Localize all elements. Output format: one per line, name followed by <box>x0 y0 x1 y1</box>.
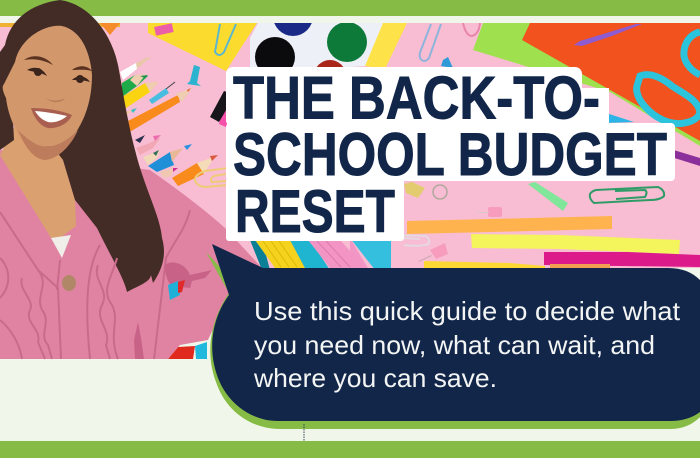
bubble navy body <box>212 244 700 421</box>
eyebrows <box>24 56 53 65</box>
title text <box>233 64 667 245</box>
blue paper clip <box>215 24 236 55</box>
gold binder clip <box>404 182 447 199</box>
green paper <box>473 23 700 146</box>
nose <box>46 98 65 102</box>
cyan scissors <box>637 32 700 124</box>
bubble text: where you can save. <box>253 363 497 393</box>
neck and chest <box>0 110 76 238</box>
title white backing <box>226 67 675 241</box>
cyan shard <box>609 114 634 123</box>
orange notebook <box>522 23 700 141</box>
yellow highlighter <box>471 234 680 254</box>
cardigan <box>0 150 262 359</box>
silver paper clip <box>404 234 430 247</box>
purple marker <box>675 150 700 166</box>
gold paper clip <box>195 168 228 187</box>
cyan block <box>352 241 391 268</box>
woman illustration <box>0 0 262 359</box>
pink pencil tape roll <box>210 91 228 127</box>
small paper clips <box>420 24 441 61</box>
cyan pushpins <box>149 65 201 104</box>
pink pushpin lower <box>419 243 448 262</box>
top green band <box>0 0 700 16</box>
school supplies photo <box>0 0 700 270</box>
speech bubble <box>206 244 700 429</box>
cable knit right <box>87 210 190 359</box>
title <box>226 64 675 245</box>
pink pushpin <box>477 207 502 217</box>
title text: THE BACK-TO- <box>233 64 600 132</box>
mint highlighter <box>528 182 568 211</box>
sleeve folds <box>134 262 212 359</box>
cardigan button <box>62 275 76 291</box>
purple pen <box>574 24 642 46</box>
green paper clip <box>590 187 664 203</box>
dotted connector <box>303 424 305 441</box>
bubble green shadow <box>206 252 700 429</box>
mouth <box>31 108 72 128</box>
eyes <box>27 68 47 76</box>
title text: RESET <box>235 178 395 245</box>
bubble text: you need now, what can wait, and <box>254 330 655 360</box>
yellow highlighter lower <box>424 261 545 268</box>
chin shadow <box>18 130 78 160</box>
yellow notebook <box>148 23 257 71</box>
magenta highlighter <box>544 252 700 267</box>
orange highlighter <box>407 216 612 234</box>
lower colored pencils <box>135 135 218 186</box>
watercolor palette <box>250 23 383 67</box>
cable knit left <box>0 212 61 359</box>
bubble text <box>253 296 681 393</box>
hair back <box>0 0 164 292</box>
face <box>3 26 92 158</box>
bubble text: Use this quick guide to decide what <box>254 296 681 326</box>
upper colored pencils <box>120 57 192 133</box>
stripes behind bubble <box>168 342 207 359</box>
striped strips <box>250 241 350 268</box>
yellow strip <box>365 23 407 69</box>
teeth <box>35 111 67 122</box>
white undershirt <box>51 235 71 258</box>
bottom green band <box>0 441 700 458</box>
